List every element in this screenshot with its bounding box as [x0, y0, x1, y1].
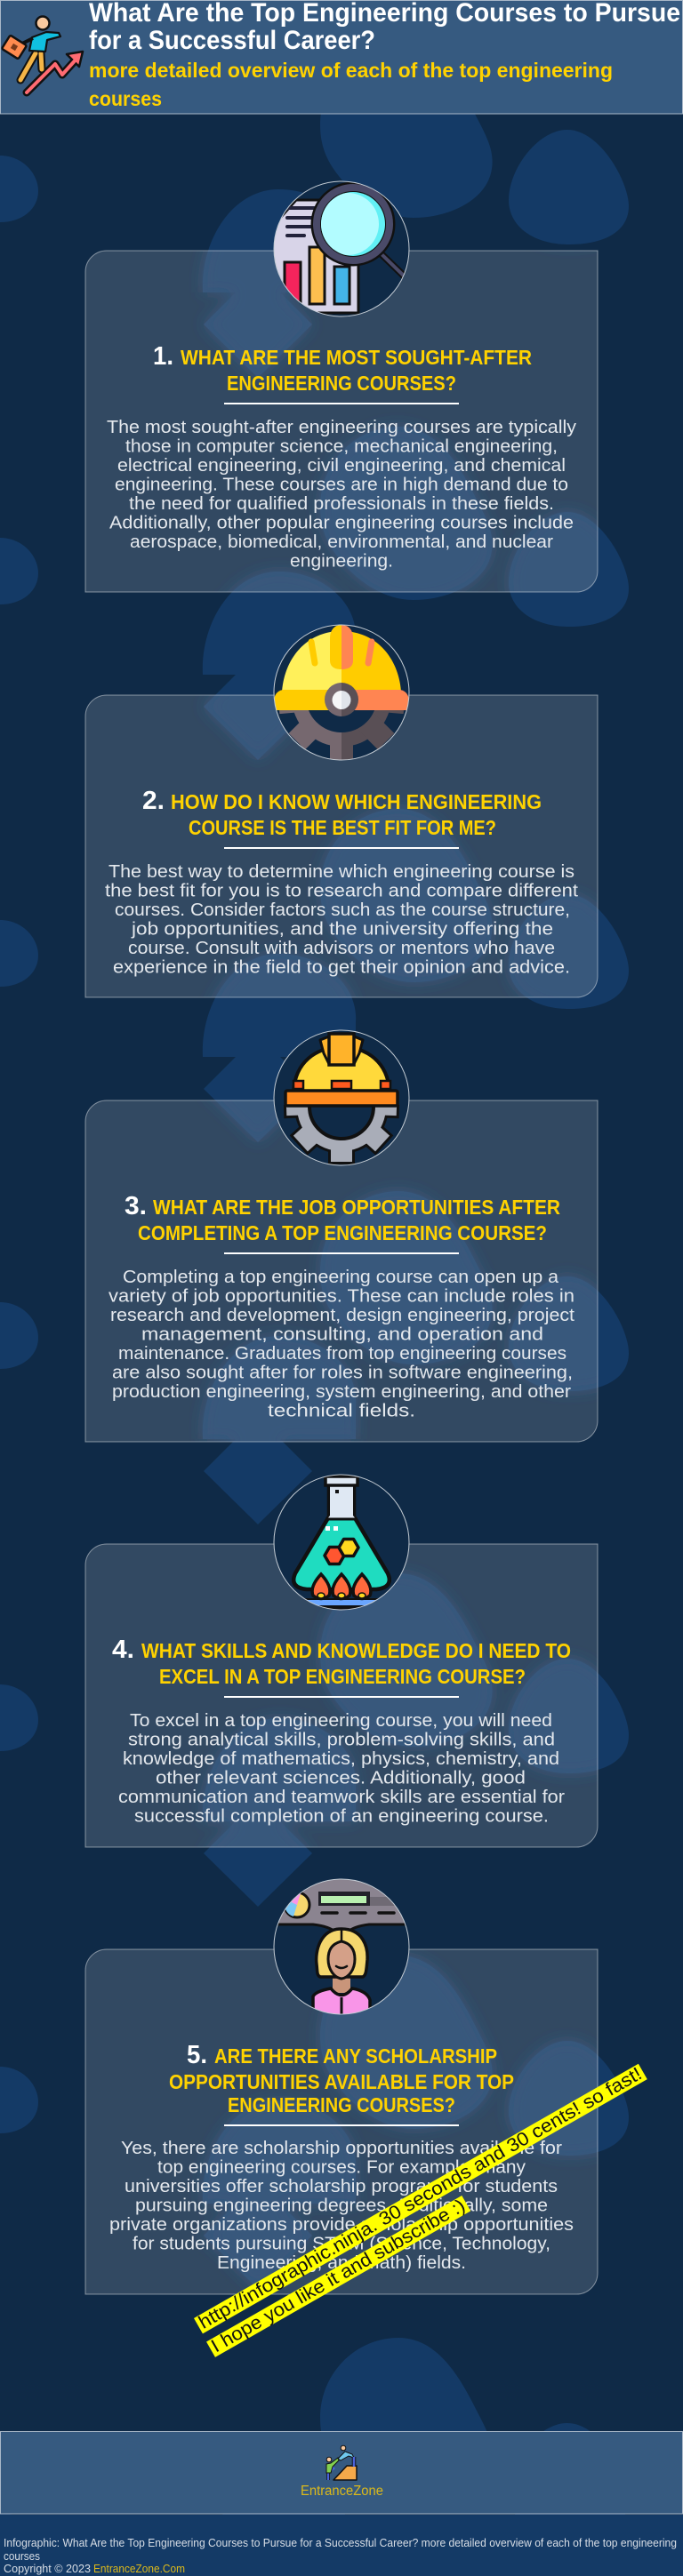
heading 4: WHAT SKILLS AND KNOWLEDGE DO I NEED TO: [141, 1639, 571, 1662]
body text 3: technical fields.: [268, 1401, 415, 1420]
heading 4: [112, 1636, 571, 1688]
icon: yellow hard hat with gear: [274, 625, 409, 760]
body text 4: knowledge of mathematics, physics, chemistry, and: [123, 1749, 559, 1769]
body text 1: engineering. These courses are in high demand due to: [115, 475, 568, 494]
panel: question 4: [85, 1543, 598, 1847]
title: [89, 0, 680, 55]
footer logo panel: [0, 2432, 683, 2514]
body text 2: the best fit for you is to research and compare different: [105, 882, 578, 901]
body text 3: Completing a top engineering course can open up a: [123, 1268, 559, 1287]
body text 4: [118, 1711, 565, 1826]
heading 5: 5.: [187, 2041, 207, 2069]
body text 2: course. Consult with advisors or mentors who have: [128, 939, 555, 958]
icon: chemistry flask over flames: [274, 1475, 409, 1612]
subtitle: more detailed overview of each of the top engineering: [89, 59, 613, 82]
body text 1: those in computer science, mechanical engineering,: [125, 437, 558, 457]
body text 5: for students pursuing STEM (Science, Technology,: [133, 2235, 550, 2254]
icon: hard hat on grey gear: [274, 1030, 409, 1165]
body text 1: aerospace, biomedical, environmental, and nuclear: [130, 532, 553, 552]
heading 3: 3.: [125, 1192, 147, 1220]
body text 3: maintenance. Graduates from top engineering courses: [118, 1344, 566, 1364]
body text 5: Engineering, and Math) fields.: [217, 2253, 466, 2273]
body text 4: successful completion of an engineering course.: [134, 1806, 549, 1826]
footer credits: EntranceZone.Com: [93, 2562, 185, 2575]
body text 3: are also sought after for roles in software engineering,: [112, 1364, 573, 1383]
body text 1: electrical engineering, civil engineering, and chemical: [117, 456, 566, 476]
heading 2: HOW DO I KNOW WHICH ENGINEERING: [171, 790, 542, 813]
body text 2: [105, 862, 578, 978]
body text 3: production engineering, system engineering, and other: [112, 1382, 571, 1402]
panel: question 5: [85, 1948, 598, 2295]
body text 3: management, consulting, and operation and: [141, 1324, 543, 1344]
footer credits: courses: [4, 2549, 40, 2563]
heading 5: ENGINEERING COURSES?: [228, 2093, 455, 2116]
body text 3: [108, 1268, 575, 1420]
body text 5: top engineering courses. For example, many: [157, 2158, 526, 2178]
heading 2: [142, 787, 542, 839]
body text 2: experience in the field to get their opinion and advice.: [113, 958, 570, 978]
heading 1: 1.: [153, 342, 173, 371]
body text 5: Yes, there are scholarship opportunities available for: [121, 2139, 562, 2158]
icon: woman under presentation board: [274, 1879, 409, 2014]
body text 3: research and development, design engineering, project: [110, 1306, 575, 1325]
subtitle: courses: [89, 87, 162, 110]
heading 3: [125, 1192, 560, 1244]
body text 5: private organizations provide scholarship opportunities: [109, 2215, 574, 2235]
title: for a Successful Career?: [89, 26, 375, 55]
brand name: EntranceZone: [301, 2484, 383, 2499]
heading 3: WHAT ARE THE JOB OPPORTUNITIES AFTER: [153, 1196, 560, 1219]
panel: question 3: [85, 1100, 598, 1442]
heading 5: OPPORTUNITIES AVAILABLE FOR TOP: [169, 2070, 514, 2093]
panel: question 2: [85, 695, 598, 997]
body text 4: other relevant sciences. Additionally, good: [156, 1769, 526, 1788]
callout: yellow diagonal watermark strips: http://infographic.ninja. 30 seconds and 30 cents! so fast!: [196, 2063, 646, 2333]
icon: two climbers helping on a step: [326, 2445, 357, 2480]
heading 4: 4.: [112, 1636, 134, 1664]
body text 4: communication and teamwork skills are essential for: [118, 1788, 565, 1807]
callout: yellow diagonal watermark strips: I hope you like it and subscribe :): [208, 2196, 469, 2356]
body text 2: The best way to determine which engineering course is: [108, 862, 575, 882]
heading 4: EXCEL IN A TOP ENGINEERING COURSE?: [159, 1665, 526, 1688]
body text 2: courses. Consider factors such as the course structure,: [115, 900, 570, 920]
heading 2: COURSE IS THE BEST FIT FOR ME?: [189, 816, 496, 839]
panel: question 1: [85, 251, 598, 592]
footer credits: [0, 2515, 683, 2576]
body text 5: [109, 2139, 574, 2273]
body text 1: Additionally, other popular engineering courses include: [109, 514, 574, 533]
heading 1: WHAT ARE THE MOST SOUGHT-AFTER: [181, 346, 532, 369]
heading 3: COMPLETING A TOP ENGINEERING COURSE?: [138, 1221, 547, 1244]
body text 1: The most sought-after engineering courses are typically: [107, 418, 576, 437]
heading 5: ARE THERE ANY SCHOLARSHIP: [214, 2044, 497, 2068]
body text 5: pursuing engineering degrees. Additionally, some: [135, 2196, 548, 2215]
footer credits: Copyright © 2023: [4, 2562, 91, 2575]
subtitle: [89, 59, 613, 110]
heading 1: ENGINEERING COURSES?: [227, 372, 456, 395]
body text 2: job opportunities, and the university offering the: [131, 919, 553, 939]
icon: magnifier over bar chart: [267, 181, 411, 316]
body text 1: the need for qualified professionals in these fields.: [129, 494, 554, 514]
heading 1: [153, 342, 532, 395]
body text 1: [107, 418, 576, 571]
heading 5: [169, 2041, 514, 2116]
body text 3: variety of job opportunities. These can include roles in: [108, 1287, 575, 1307]
body text 1: engineering.: [290, 551, 393, 571]
body text 5: universities offer scholarship programs for students: [125, 2177, 558, 2196]
body text 4: strong analytical skills, problem-solving skills, and: [128, 1730, 555, 1749]
icon: climbing businessman on rising arrow: [2, 16, 83, 92]
header banner: [0, 0, 683, 114]
heading 2: 2.: [142, 787, 165, 815]
body text 4: To excel in a top engineering course, you will need: [130, 1711, 552, 1731]
